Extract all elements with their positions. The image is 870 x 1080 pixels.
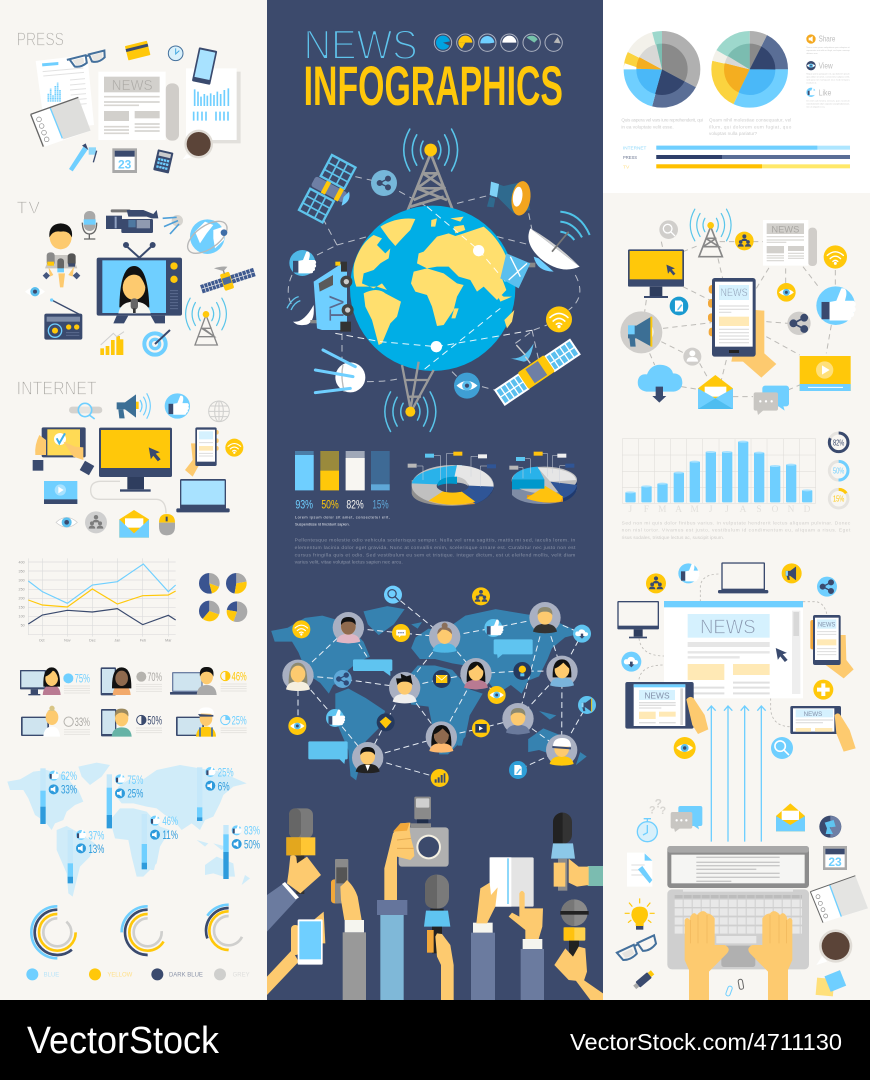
icon: megaphone: [782, 563, 802, 583]
legend: view: Neque porro quisquam est, qui dolorem ipsum: [806, 73, 850, 76]
icon: eye: [56, 517, 77, 527]
chart: monthly bars: J: [629, 505, 633, 515]
stat: asia: [197, 766, 234, 821]
icon: envelope: [776, 803, 805, 831]
chart: percentage bars: 82%: [346, 497, 364, 511]
icon: people: [646, 573, 666, 593]
icon: satellite: [196, 257, 257, 298]
icon: share: [817, 577, 837, 597]
line chart: [19, 558, 176, 643]
chart: monthly bars: M: [658, 505, 667, 515]
icon: tablet in hand: [625, 682, 708, 734]
hand with dark microphone: [551, 813, 603, 891]
icon: calendar: [112, 148, 137, 173]
icon: USB stick: [632, 970, 655, 990]
chart: progress rings: [829, 433, 848, 508]
paragraph: [295, 538, 576, 566]
icon: eye: [454, 373, 480, 399]
person card: 46%: 46%: [232, 669, 247, 683]
paragraph: cursus fringilla quis et odio. Sed vestibulum eu sem et tristique. Integer dictum, est ut eleifend mollis, velit diam: [295, 552, 575, 558]
icon: landscape tablet in hand: [790, 706, 856, 752]
title: infographics: INFOGRAPHICS: [304, 55, 563, 117]
icon: tablet in hand: NEWS: [644, 690, 670, 700]
pie captions: in ea voluptate velit esse.: [621, 124, 674, 129]
icon: glasses: [617, 935, 659, 963]
world map with connected people: [271, 586, 596, 787]
map shape: [271, 606, 587, 780]
icon: sputnik: [315, 350, 365, 393]
icon: tablet with hand: [33, 427, 94, 475]
icon: clock: [168, 46, 183, 61]
icon: phone in hand: [185, 427, 219, 477]
icon: newspaper: NEWS: [771, 224, 799, 234]
icons on the map: [288, 586, 596, 787]
chart: percentage bars: 93%: [295, 497, 313, 511]
avatar: man dark skin: [333, 612, 364, 643]
icon: search bar: [69, 403, 102, 419]
icon: TV van: [314, 262, 354, 332]
person card: 75%: [20, 667, 90, 695]
icon: sticky notes: [816, 970, 846, 996]
icon: chat bubbles: [671, 806, 702, 832]
icon: calendar: 23: [828, 855, 842, 869]
line chart: Jan: [114, 639, 120, 643]
avatar: woman grey hair: [282, 660, 314, 691]
icon: reporter surrounded by microphones: [43, 223, 80, 287]
progress bars: TV: [623, 164, 630, 170]
icon: glasses: [67, 51, 107, 69]
hand with round microphone: [554, 899, 603, 1000]
panel: bars pies text and map: [271, 451, 596, 787]
icon: search: [659, 220, 678, 239]
icon: paper clips: [725, 979, 744, 996]
icon: megaphone: [620, 311, 662, 353]
avatar: worker with helmet: [546, 734, 577, 766]
chart: second double pie: [730, 50, 769, 88]
stat: north america: 62%: [61, 769, 77, 783]
icon: envelope: [119, 510, 149, 538]
icon: newspaper: [763, 220, 817, 266]
icon: left document: [36, 55, 94, 130]
icon: laptop: [718, 562, 768, 593]
pie captions: [621, 118, 792, 136]
network dashed lines: [645, 242, 835, 397]
chart: radial gauge two: [122, 906, 174, 958]
avatar: man blond: [502, 703, 534, 734]
person card: 50%: [101, 709, 162, 737]
panel background: right top: [603, 0, 870, 193]
icon: light bulb: [625, 898, 655, 930]
chart: radial gauge three: [203, 905, 255, 957]
avatar: woman black hair bob: [546, 656, 578, 687]
chart: monthly bars: D: [804, 505, 811, 515]
chart: percentage bars: 50%: [321, 497, 339, 511]
laptop with hands on keyboard: [667, 846, 809, 1000]
stat: oceania: [223, 824, 260, 879]
icon: question marks: ?: [660, 805, 666, 817]
panel: world map statistics and gauges: [7, 763, 260, 980]
icon: tower top with signal: [404, 129, 458, 211]
title: news: NEWS: [304, 21, 418, 68]
icon: desktop monitor: [99, 428, 172, 492]
hand with yellow microphone: [267, 808, 321, 932]
chart: radial gauge one: [31, 906, 83, 958]
icon: question marks: [649, 796, 666, 817]
chart: monthly bars: O: [772, 505, 779, 515]
icon: people: [735, 232, 754, 250]
person card: 25%: 25%: [232, 713, 247, 727]
icon: small dish on satellite: [510, 343, 534, 363]
icon: notebook: [31, 97, 91, 147]
icon: credit card: [125, 41, 150, 60]
title pie icons: [434, 34, 562, 51]
chart: monthly bars: [622, 439, 816, 515]
legend: view: sed quia non numquam eius modi tempora: [806, 79, 850, 82]
icon: megaphone: [117, 393, 150, 419]
icon: television with presenter: [97, 242, 182, 323]
panel: pie charts and bars: [621, 34, 850, 170]
icon: highlighter: [69, 143, 97, 171]
paragraph: varius velit, vitae volutpat lectus sapien nec arcu.: [295, 560, 403, 566]
legend: share: dolores eos.: [806, 52, 818, 55]
icon: large dish: [500, 212, 590, 288]
legend: like: [806, 87, 850, 108]
icon: envelope: [698, 375, 733, 409]
icon: laptop: [176, 479, 230, 512]
stat: south america: 37%: [88, 828, 105, 842]
chart: progress rings: 82%: [833, 437, 845, 447]
icon: user: [683, 348, 701, 366]
chart: monthly bars: J: [709, 505, 713, 515]
icon: coffee cup: [183, 130, 213, 159]
icon: globe: [209, 401, 229, 422]
browser window: [664, 601, 803, 698]
line chart: Oct: [39, 639, 45, 643]
icon: calendar: 23: [118, 157, 132, 171]
progress bars: INTERNET: [623, 146, 646, 152]
line chart: 150: [19, 606, 25, 610]
person card: 33%: [21, 706, 90, 737]
icon: monitor: [628, 249, 684, 298]
avatar: man in black suit: [352, 742, 383, 773]
progress bars: [623, 146, 850, 170]
stat: asia: 25%: [218, 766, 234, 780]
chart: percentage bars: [295, 451, 390, 511]
caption: [295, 516, 390, 526]
paragraph: [622, 520, 851, 541]
icon: people: [85, 511, 107, 533]
icon: small dish: [287, 297, 317, 325]
footer: brand: VectorStock: [27, 1020, 220, 1062]
legend: like: nisi ut aliquid ex ea.: [806, 105, 826, 108]
pie captions: Quam nihil molestiae consequatur, vel: [709, 118, 791, 123]
icon: wifi: [546, 306, 572, 332]
chart: progress rings: 15%: [833, 494, 845, 504]
icon: newspaper: NEWS: [112, 78, 153, 94]
person card: 33%: 33%: [75, 715, 90, 729]
icon: right satellite: [494, 338, 580, 405]
footer: image id: VectorStock.com/4711130: [570, 1029, 842, 1055]
chart: monthly bars: M: [691, 505, 700, 515]
icon: smartphone: [192, 47, 217, 85]
panel: title and globe: [287, 21, 590, 431]
avatar: woman long black hair: [460, 658, 492, 689]
footer bar: [0, 1000, 870, 1080]
paragraph: non nisl tortor. Vivamus est justo, vestibulum id condimentum eu, aliquam a risus. Eget: [622, 528, 851, 534]
line chart: 350: [19, 569, 25, 573]
chart: monthly bars: F: [644, 505, 649, 515]
legend: share: [806, 34, 850, 55]
stat: south america: [68, 828, 105, 883]
icon: wifi: [225, 439, 243, 457]
chart: first double pie: [643, 50, 681, 88]
pie captions: illum, qui dolorem eum fugiat, quo: [709, 124, 792, 129]
stat: south america: 13%: [88, 842, 105, 856]
icon: download cloud: [638, 365, 682, 403]
stat: oceania: 83%: [244, 824, 260, 838]
browser window: NEWS: [700, 616, 756, 639]
icon: target: [144, 330, 170, 355]
chart: second 3D pie: [509, 452, 577, 504]
legend: view: incidunt ut.: [806, 82, 817, 85]
icon: share: [371, 170, 397, 196]
line chart: Nov: [64, 639, 71, 643]
icon: eye: [777, 283, 796, 302]
legend: share: Share: [819, 35, 836, 44]
line chart: 50: [21, 624, 25, 628]
icon: notebook: [810, 876, 868, 923]
icon: calendar: [823, 846, 847, 870]
line chart: 300: [19, 578, 25, 582]
paragraph: Pellentesque molestie odio vehicula scelerisque semper. Nulla vel urna sagittis, mattis mi sed, iaculis lorem. In: [295, 538, 576, 544]
icon: landscape tablet in hand: NEWS: [804, 711, 823, 718]
icon: plus: [813, 680, 833, 700]
legend: GREY: [233, 972, 250, 978]
chart: monthly bars: S: [756, 505, 762, 515]
heading: TV: TV: [17, 197, 40, 217]
icon: search: [771, 737, 793, 759]
legend: [26, 968, 250, 980]
icon: smartphone with news in hand: [708, 278, 776, 378]
line chart: Mar: [165, 639, 172, 643]
chart: monthly bars: A: [675, 505, 682, 515]
icon: thumb up: [678, 563, 700, 583]
icon: thumb up: [816, 286, 856, 325]
panel background: centre column: [267, 0, 603, 1000]
icon: chat bubbles: [754, 386, 789, 415]
caption: Suspendisse id tincidunt sapien.: [295, 522, 350, 526]
panel: press and TV: [17, 28, 257, 355]
hand with voice recorder: [331, 859, 366, 1000]
icon: desk lamp: [819, 816, 841, 838]
stat: asia: 6%: [218, 779, 230, 793]
icon: radio: [44, 298, 82, 340]
line chart: 250: [19, 588, 25, 592]
icon: eye: [674, 737, 696, 759]
legend: like: Like: [819, 88, 832, 97]
line chart: 200: [19, 597, 25, 601]
panel background: left column: [0, 0, 267, 1000]
stat: africa: 11%: [162, 828, 178, 842]
icon: video player: [800, 356, 851, 391]
heading: press: PRESS: [17, 28, 64, 49]
legend: view: View: [819, 61, 833, 70]
icon: sputnik: [163, 215, 183, 234]
icon: bottom tower with signal: [385, 362, 436, 431]
icon: download cloud: [621, 652, 641, 672]
legend: DARK BLUE: [169, 972, 203, 978]
panel: device network and bar chart: [620, 209, 856, 541]
icon: left satellite: [298, 153, 363, 228]
icon: video camera: [106, 209, 158, 233]
stat: africa: [142, 814, 178, 869]
avatar: man spiky hair: [389, 672, 420, 703]
network dashed lines: [298, 595, 587, 778]
icon: smartphone with news in hand: NEWS: [720, 287, 748, 299]
avatar: woman with bun: [429, 621, 460, 653]
stat: north america: [40, 768, 77, 824]
icon: growth chart: [100, 332, 124, 355]
orbit dashed lines: [288, 177, 580, 391]
icon: thumb up: [289, 250, 316, 276]
icon: coffee cup: [816, 929, 852, 965]
panel: hands holding media devices: [267, 797, 603, 1000]
icon: question marks: ?: [649, 804, 656, 816]
world map: [7, 763, 250, 897]
person card: 50%: 50%: [147, 713, 162, 727]
hand with smartphone: [267, 912, 325, 995]
hand with blue microphone: [424, 875, 454, 1000]
chart: monthly bars: A: [740, 505, 747, 515]
icon: document: [670, 297, 688, 315]
icon: newspaper: [98, 72, 179, 141]
chart: first 3D donut: [408, 452, 496, 506]
chart: percentage bars: 15%: [372, 497, 389, 511]
avatar: man grey hair: [529, 602, 561, 633]
paragraph: Sed non mi quis dolor finibus varius. In vulputate hendrerit lectus aliquam pulvinar. Donec: [622, 520, 851, 526]
line chart: Feb: [140, 639, 146, 643]
chart: monthly bars: N: [788, 505, 795, 515]
icon: monitor: [617, 601, 659, 638]
legend: like: exercitationem ullam corporis suscipit laboriosam,: [806, 102, 850, 105]
caption: Lorem ipsum dolor sit amet, consectetur elit,: [295, 516, 390, 520]
globe: [335, 206, 534, 371]
person card: 70%: 70%: [147, 670, 162, 684]
icon: calculator: [153, 149, 174, 174]
stat: atlantic: [107, 773, 144, 828]
person card: 46%: [170, 667, 247, 695]
chart: progress rings: 50%: [833, 466, 845, 476]
mouse cable and mouse: [91, 481, 175, 535]
legend: view: quia dolor sit amet, consectetur adipisci velit,: [806, 76, 850, 79]
icon: thumb up: [165, 393, 190, 419]
icon: globe with orbit: [182, 215, 232, 260]
heading: internet: INTERNET: [17, 377, 97, 398]
person card: 70%: [101, 667, 162, 695]
icon: phone in hand: NEWS: [818, 621, 836, 628]
progress bars: PRESS: [623, 155, 638, 161]
stat: atlantic: 25%: [127, 787, 144, 801]
legend: share: aspernatur aut odit aut fugit, sed quia consequ: [806, 49, 850, 52]
icon: stopwatch: [637, 819, 657, 842]
paragraph: elementum lacinia dolor eget gravida. Nunc at convallis enim, scelerisque ornare est. Curabitur nec justo non est: [295, 545, 576, 551]
icon: phone in hand: [810, 615, 854, 678]
pie captions: Quis aspera vel vars iure reprehenderit, qui: [621, 118, 703, 123]
icon: question marks: ?: [655, 796, 662, 810]
icon: document with pencil: [627, 853, 652, 887]
icon: megaphone: [487, 180, 533, 217]
connector lines: [639, 574, 827, 727]
panel background: right column: [603, 193, 870, 1000]
icon: broadcast tower: [186, 298, 226, 345]
line chart: Dec: [89, 639, 96, 643]
icon: microphone: [82, 211, 97, 239]
line chart: 100: [19, 615, 25, 619]
speech bubbles: [308, 639, 533, 764]
person card: 75%: 75%: [75, 672, 90, 686]
icon: TV van: TV: [327, 295, 349, 321]
panel: internet: [17, 377, 243, 643]
line chart: 400: [19, 560, 25, 564]
legend: like: Ut enim ad minima veniam, quis nostrum: [806, 99, 850, 102]
arrows up: [707, 706, 766, 842]
avatar: woman dark skin: [426, 721, 457, 753]
icon: video player: [44, 481, 77, 504]
pie captions: voluptas nulla pariatur?: [709, 131, 758, 136]
hands with book: [471, 857, 544, 1000]
chart: monthly bars: J: [725, 505, 729, 515]
stat: north america: 33%: [61, 783, 77, 797]
icon: wifi: [824, 245, 847, 269]
legend: share: Nemo enim ipsam voluptatem quia voluptas sit: [806, 46, 850, 49]
stat: atlantic: 75%: [127, 773, 144, 787]
legend: YELLOW: [107, 972, 133, 978]
icon: tower with signal: [690, 209, 731, 257]
chart: four small pies: [204, 578, 242, 617]
paragraph: risus sodales, tristique lectus ac, suscipit ipsum.: [622, 535, 724, 541]
panel: people statistics: [20, 667, 247, 737]
stat: africa: 46%: [162, 814, 178, 828]
person card: 25%: [176, 707, 247, 737]
icon: eye: [25, 287, 45, 296]
icon: share: [787, 312, 811, 335]
icon: report with chart: [186, 68, 241, 143]
stat: oceania: 50%: [244, 837, 260, 851]
panel: devices and laptop: [617, 562, 868, 1000]
legend: BLUE: [44, 972, 59, 978]
hand with camera: [377, 797, 449, 1000]
legend: view: [806, 61, 850, 85]
